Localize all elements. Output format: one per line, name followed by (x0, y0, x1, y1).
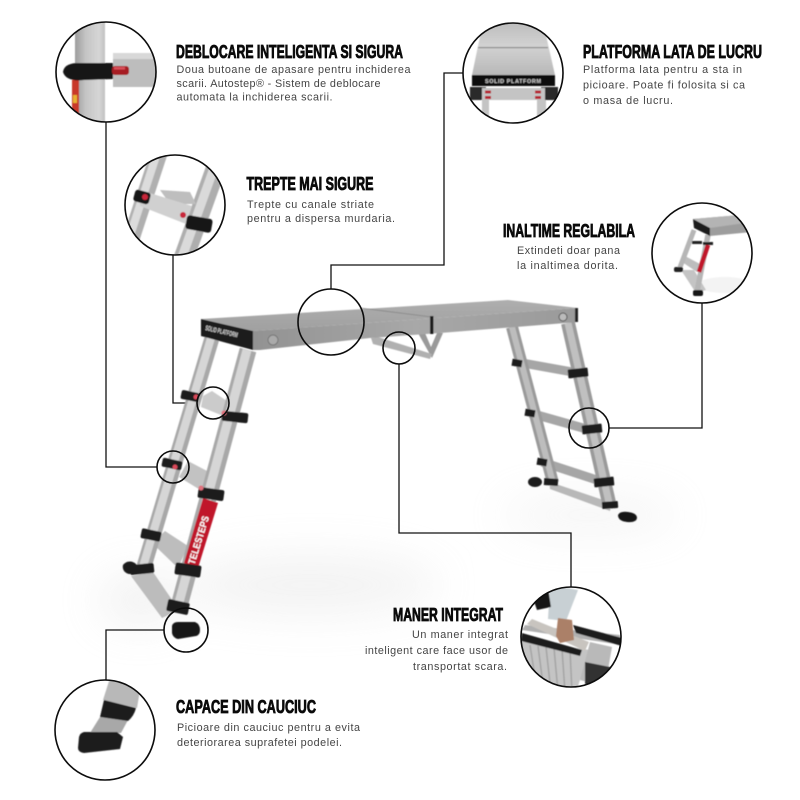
red label (184, 498, 218, 568)
right ladder (511, 323, 637, 522)
heading: DEBLOCARE INTELIGENTA SI SIGURA (176, 42, 403, 62)
detail circle: adjustable height (652, 203, 753, 303)
floor shadow (100, 497, 680, 624)
description: Doua butoane de apasare pentru inchiderea (176, 64, 410, 76)
heading: TREPTE MAI SIGURE (246, 174, 374, 194)
callout: wide platform (583, 42, 762, 107)
description (177, 722, 360, 749)
callout: smart release (176, 42, 410, 104)
detail circle: rubber cap (55, 678, 155, 780)
description (176, 64, 410, 104)
platform top (201, 300, 578, 331)
connector lines (106, 73, 702, 680)
description: pentru a dispersa murdaria. (247, 213, 395, 225)
clamps (511, 359, 618, 509)
callout: integrated handle (365, 605, 508, 673)
steps (152, 531, 188, 568)
description: la inaltimea dorita. (517, 260, 618, 272)
description: Trepte cu canale striate (247, 199, 374, 211)
platform end cap (201, 319, 253, 350)
description: inteligent care face usor de (365, 645, 508, 657)
heading: CAPACE DIN CAUCIUC (176, 697, 316, 717)
label text: TELESTEPS (187, 515, 212, 566)
right rubber feet (528, 477, 542, 487)
description (583, 64, 745, 107)
main product: platform ladder (123, 300, 637, 639)
description: deteriorarea suprafetei podelei. (177, 737, 342, 749)
description: Un maner integrat (412, 629, 508, 641)
band text: SOLID PLATFORM (485, 79, 541, 85)
description: transportat scara. (413, 661, 507, 673)
callout: rubber caps (176, 697, 360, 749)
hinge bolts (268, 335, 278, 345)
detail circle: wide platform (463, 22, 563, 125)
description: o masa de lucru. (583, 95, 673, 107)
description: automata la inchiderea scarii. (176, 92, 332, 104)
description: Picioare din cauciuc pentru a evita (177, 722, 360, 734)
handle and bracket (371, 333, 443, 359)
platform front face (253, 308, 578, 350)
description: picioare. Poate fi folosita si ca (583, 80, 745, 92)
front leg (178, 350, 248, 610)
description: Platforma lata pentru a sta in (583, 64, 742, 76)
detail circle: step (125, 150, 225, 260)
rubber feet (123, 562, 141, 574)
clamps (130, 390, 248, 615)
platform end text: SOLID PLATFORM (205, 325, 238, 339)
detail circle: integrated handle (521, 585, 625, 695)
rear leg (143, 338, 212, 570)
left ladder (123, 338, 248, 639)
heading: INALTIME REGLABILA (503, 221, 635, 241)
description (517, 245, 620, 272)
red buttons (194, 394, 198, 400)
heading: MANER INTEGRAT (393, 605, 503, 625)
description (365, 629, 508, 673)
description: Extindeti doar pana (517, 245, 620, 257)
callout: adjustable height (503, 221, 635, 272)
detail circle: lock button (55, 21, 157, 123)
callout: safer steps (246, 174, 395, 225)
small marker circles (157, 289, 609, 652)
description: scarii. Autostep® - Sistem de deblocare (176, 78, 380, 90)
foot bar (131, 572, 179, 618)
description (247, 199, 395, 225)
platform join (360, 308, 432, 317)
